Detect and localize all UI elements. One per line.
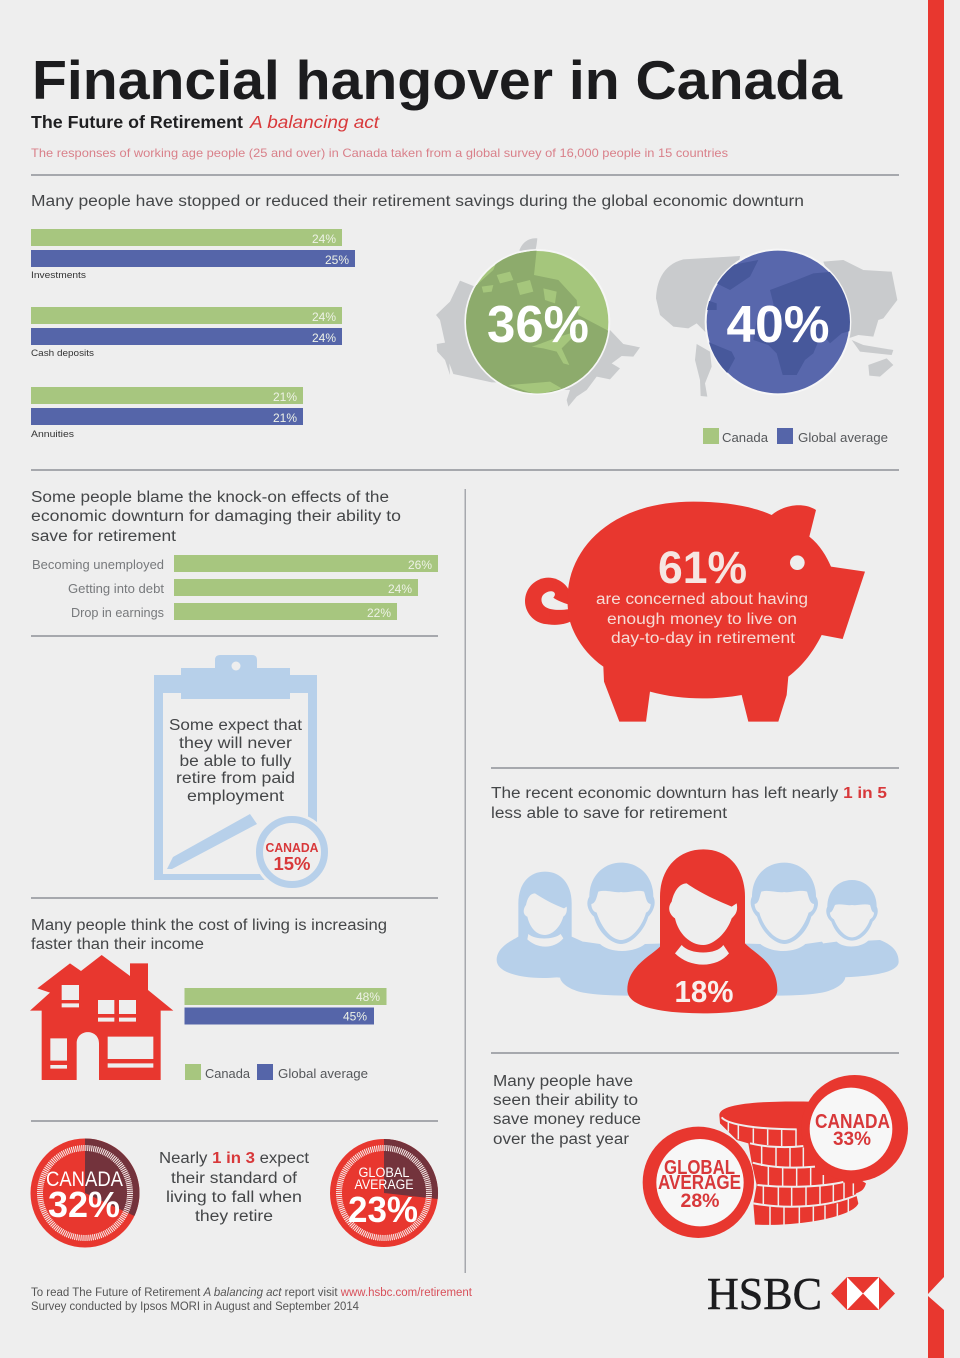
heading: 1 in 5: less able to save for retirement bbox=[491, 805, 728, 822]
footer note: Survey conducted by Ipsos MORI in August and September 2014 bbox=[31, 1301, 360, 1313]
bar chart: investments, cash deposits, annuities bbox=[31, 229, 355, 440]
subtitle bbox=[31, 112, 380, 132]
bar chart: knock-on effects bbox=[32, 555, 438, 620]
bar chart: investments, cash deposits, annuities: 24% bbox=[312, 310, 336, 324]
icon: clipboard with 15% badge bbox=[154, 655, 331, 891]
heading: knock-on effects: Some people blame the knock-on effects of the bbox=[31, 489, 389, 506]
bar chart: investments, cash deposits, annuities: 21% bbox=[273, 411, 297, 425]
pie: Canada 32%: CANADA bbox=[46, 1168, 123, 1191]
text: nearly 1 in 3: their standard of bbox=[171, 1170, 298, 1187]
text: ability to save: save money reduce bbox=[493, 1111, 641, 1128]
legend: maps bbox=[703, 428, 888, 445]
icon: piggy bank 61%: enough money to live on bbox=[607, 611, 797, 628]
bar chart: knock-on effects: 26% bbox=[408, 558, 432, 572]
icon: group of people 18% bbox=[497, 849, 899, 1013]
pie: Canada 32%: 32% bbox=[48, 1184, 120, 1225]
icon: coin stack with badges: CANADA bbox=[815, 1111, 890, 1133]
bar chart: knock-on effects: Drop in earnings bbox=[71, 605, 164, 620]
text: nearly 1 in 3: living to fall when bbox=[166, 1189, 302, 1206]
HSBC logo bbox=[707, 1268, 895, 1319]
bar chart: knock-on effects: 24% bbox=[388, 582, 412, 596]
icon: piggy bank 61% bbox=[525, 502, 865, 722]
text: ability to save: seen their ability to bbox=[493, 1092, 638, 1109]
legend: maps: Canada bbox=[722, 431, 768, 445]
icon: clipboard with 15% badge: employment bbox=[187, 788, 285, 805]
text: ability to save bbox=[493, 1073, 641, 1148]
icon: coin stack with badges: 28% bbox=[680, 1191, 720, 1212]
bar chart: knock-on effects: Becoming unemployed bbox=[32, 557, 164, 572]
icon: piggy bank 61%: 61% bbox=[658, 542, 747, 593]
icon: coin stack with badges: 33% bbox=[833, 1129, 871, 1150]
heading: savings: Many people have stopped or reduced their retirement savings during the global economic downturn bbox=[31, 193, 804, 210]
bar chart: cost of living: 48% bbox=[356, 990, 380, 1004]
man right bbox=[739, 863, 845, 996]
legend: cost of living: Global average bbox=[278, 1067, 368, 1081]
legend: maps: Global average bbox=[798, 431, 888, 445]
pie: global average 23%: GLOBAL bbox=[358, 1165, 410, 1180]
man left bbox=[560, 863, 667, 996]
icon: coin stack with badges: GLOBAL bbox=[664, 1157, 735, 1179]
icon: clipboard with 15% badge: CANADA bbox=[266, 840, 319, 855]
map: Canada with 36% circle: 36% bbox=[487, 296, 589, 354]
bar chart: knock-on effects: 22% bbox=[367, 606, 391, 620]
heading: knock-on effects: economic downturn for damaging their ability to bbox=[31, 508, 401, 525]
icon: group of people 18%: 18% bbox=[674, 974, 734, 1009]
pie: global average 23% bbox=[330, 1139, 438, 1247]
subtitle: The Future of Retirement bbox=[31, 112, 243, 132]
text: nearly 1 in 3 bbox=[159, 1150, 310, 1225]
heading: knock-on effects bbox=[31, 489, 401, 545]
footer note bbox=[31, 1287, 473, 1313]
bar chart: cost of living: 45% bbox=[343, 1010, 367, 1024]
icon: coin stack with badges bbox=[643, 1075, 908, 1238]
center woman bbox=[627, 849, 777, 1013]
bar chart: investments, cash deposits, annuities: Cash deposits bbox=[31, 348, 94, 359]
heading: knock-on effects: save for retirement bbox=[31, 528, 177, 545]
subtitle: A balancing act bbox=[249, 112, 380, 132]
legend: cost of living: Canada bbox=[205, 1067, 250, 1081]
heading: cost of living: faster than their income bbox=[31, 936, 204, 953]
HSBC logo: HSBC bbox=[707, 1268, 822, 1319]
icon: clipboard with 15% badge: they will never bbox=[179, 735, 292, 752]
footer note: To read The Future of Retirement A balancing act report visit www.hsbc.com/retirement bbox=[31, 1287, 473, 1299]
pie: global average 23%: 23% bbox=[348, 1189, 418, 1230]
far left woman bbox=[497, 872, 590, 980]
title: Financial hangover in Canada bbox=[32, 49, 842, 111]
pie: Canada 32% bbox=[30, 1138, 140, 1248]
bar chart: investments, cash deposits, annuities: Annuities bbox=[31, 429, 74, 440]
icon: clipboard with 15% badge: 15% bbox=[274, 854, 310, 874]
bar chart: investments, cash deposits, annuities: 21% bbox=[273, 390, 297, 404]
bar chart: investments, cash deposits, annuities: Investments bbox=[31, 270, 86, 281]
icon: piggy bank 61%: are concerned about having bbox=[596, 591, 808, 608]
bar chart: investments, cash deposits, annuities: 24% bbox=[312, 232, 336, 246]
icon: piggy bank 61%: day-to-day in retirement bbox=[611, 630, 796, 647]
heading: cost of living: Many people think the cost of living is increasing bbox=[31, 917, 387, 934]
heading: 1 in 5: The recent economic downturn has left nearly 1 in 5 bbox=[491, 785, 887, 802]
heading: cost of living bbox=[31, 917, 387, 953]
map: world with 40% circle bbox=[656, 250, 897, 397]
icon: clipboard with 15% badge: Some expect that bbox=[169, 717, 303, 734]
text: ability to save: over the past year bbox=[493, 1131, 629, 1148]
red side stripe bbox=[928, 0, 944, 1358]
survey description: The responses of working age people (25 and over) in Canada taken from a global survey of 16,000 people in 15 countries bbox=[31, 146, 728, 160]
icon: house bbox=[30, 955, 173, 1080]
text: ability to save: Many people have bbox=[493, 1073, 633, 1090]
pie: global average 23%: AVERAGE bbox=[354, 1177, 414, 1192]
map: world with 40% circle: 40% bbox=[726, 296, 830, 354]
bar chart: cost of living bbox=[184, 988, 386, 1024]
text: nearly 1 in 3: they retire bbox=[195, 1208, 273, 1225]
map: Canada with 36% circle bbox=[436, 238, 640, 407]
icon: clipboard with 15% badge: retire from paid bbox=[176, 770, 295, 787]
heading: 1 in 5 bbox=[491, 785, 887, 822]
text: nearly 1 in 3: Nearly 1 in 3 expect bbox=[159, 1150, 310, 1167]
legend: cost of living bbox=[185, 1064, 368, 1081]
bar chart: knock-on effects: Getting into debt bbox=[68, 581, 164, 596]
icon: coin stack with badges: AVERAGE bbox=[658, 1172, 741, 1194]
far right man bbox=[823, 880, 899, 980]
icon: clipboard with 15% badge: be able to fully bbox=[180, 753, 292, 770]
bar chart: investments, cash deposits, annuities: 25% bbox=[325, 253, 349, 267]
bar chart: investments, cash deposits, annuities: 24% bbox=[312, 331, 336, 345]
